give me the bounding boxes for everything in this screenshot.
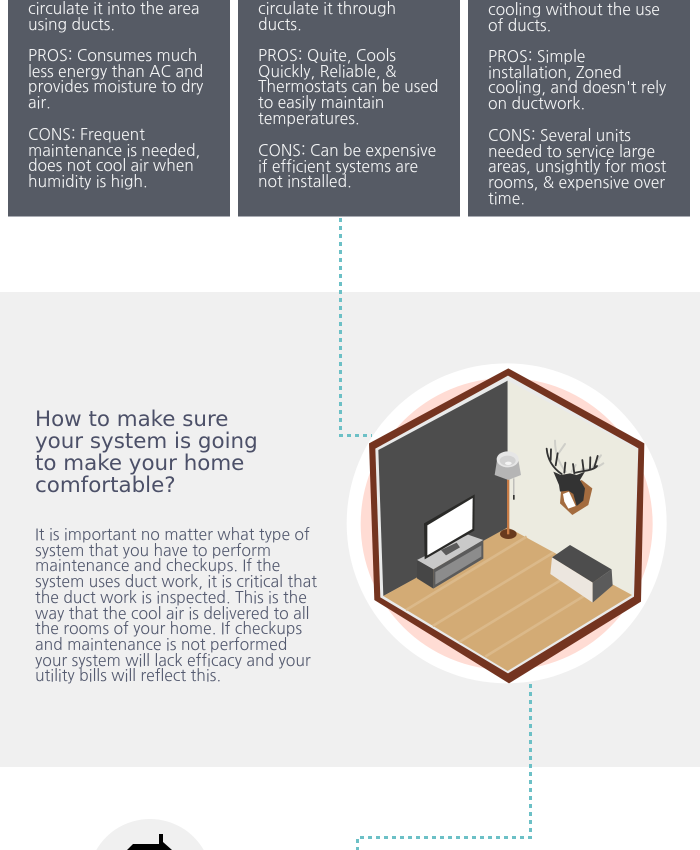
arrow: dotted connector from cards to room	[340, 218, 372, 436]
icon: house with chimney	[127, 834, 172, 850]
icon: bottom circle	[96, 819, 204, 850]
wood floor	[383, 527, 632, 671]
text: evaporative cooler cons: maintenance is needed,	[28, 144, 200, 159]
heading: how to make sure: How to make sure	[35, 407, 228, 432]
text: evaporative cooler pros: provides moisture to dry	[28, 80, 203, 95]
text: central air pros: Thermostats can be used	[258, 80, 438, 95]
text: central air pros	[258, 48, 438, 127]
heading: how to make sure: your system is going	[35, 429, 258, 454]
text: maintenance paragraph: utility bills will reflect this.	[35, 669, 221, 684]
text: maintenance paragraph: the rooms of your home. If checkups	[35, 622, 302, 637]
text: maintenance paragraph: and maintenance is not performed	[35, 638, 287, 653]
text: maintenance paragraph: your system will lack efficacy and your	[35, 654, 311, 669]
text: central air cons: not installed.	[258, 175, 352, 190]
text: central air pros: to easily maintain	[258, 96, 384, 111]
text: ductless description: of ducts.	[488, 19, 551, 34]
left wall	[378, 381, 508, 596]
heading: how to make sure	[35, 407, 258, 498]
text: evaporative cooler cons: does not cool air when	[28, 159, 194, 174]
text: ductless cons: rooms, & expensive over	[488, 176, 665, 191]
television	[424, 494, 475, 559]
text: ductless pros: installation, Zoned	[488, 66, 622, 81]
text: evaporative cooler cons: CONS: Frequent	[28, 128, 145, 143]
text: maintenance paragraph: system that you have to perform	[35, 544, 271, 559]
icon: isometric room illustration	[347, 363, 667, 683]
text: ductless description	[488, 2, 660, 34]
right wall	[508, 381, 638, 595]
text: ductless pros	[488, 49, 666, 112]
text: maintenance paragraph: the duct work is inspected. This is the	[35, 591, 307, 606]
arrow: dotted connector from room to next section	[358, 684, 530, 850]
text: ductless cons: needed to service large	[488, 145, 655, 160]
inner white hexagon	[375, 376, 638, 673]
text: evaporative cooler cons: humidity is high.	[28, 175, 148, 190]
text: central air pros: Quickly, Reliable, &	[258, 65, 396, 80]
text: central air pros: PROS: Quite, Cools	[258, 49, 396, 64]
white neck patch	[563, 492, 576, 509]
heading: how to make sure: comfortable?	[35, 473, 176, 498]
text: central air description: ducts.	[258, 18, 302, 33]
text: central air cons: CONS: Can be expensive	[258, 144, 436, 159]
text: evaporative cooler description: using ducts.	[28, 18, 115, 33]
text: ductless cons: time.	[488, 192, 525, 207]
text: ductless cons: CONS: Several units	[488, 129, 631, 144]
panel: ductless card	[468, 0, 690, 217]
text: central air description: circulate it through	[258, 2, 396, 17]
text: ductless cons: areas, unsightly for most	[488, 160, 666, 175]
text: ductless description: cooling without the use	[488, 3, 660, 18]
bench	[550, 545, 613, 603]
text: ductless pros: on ductwork.	[488, 97, 585, 112]
background antlers	[555, 441, 603, 472]
white badge circle	[347, 363, 667, 683]
text: central air description	[258, 1, 396, 33]
pink circle	[361, 378, 653, 670]
floor plank lines	[406, 537, 603, 657]
text: ductless pros: cooling, and doesn't rely	[488, 81, 666, 96]
text: ductless cons	[488, 128, 666, 207]
text: central air cons	[258, 143, 436, 190]
floor lamp	[495, 451, 521, 539]
text: evaporative cooler pros	[28, 48, 204, 111]
text: central air cons: if efficient systems are	[258, 160, 418, 175]
text: central air pros: temperatures.	[258, 112, 360, 127]
panel: maintenance section background	[0, 292, 700, 767]
text: evaporative cooler description: circulate it into the area	[28, 2, 199, 17]
text: evaporative cooler cons	[28, 128, 200, 190]
text: maintenance paragraph: way that the cool air is delivered to all	[35, 607, 309, 622]
text: evaporative cooler pros: less energy than AC and	[28, 65, 203, 80]
TV stand	[417, 535, 483, 589]
front antlers	[547, 449, 598, 474]
text: maintenance paragraph: It is important no matter what type of	[35, 528, 310, 543]
text: maintenance paragraph	[35, 527, 317, 684]
text: evaporative cooler pros: air.	[28, 96, 51, 111]
text: evaporative cooler description	[28, 1, 199, 33]
heading: how to make sure: to make your home	[35, 451, 244, 476]
brown hexagon frame	[369, 368, 644, 683]
plaque	[560, 480, 592, 515]
text: evaporative cooler pros: PROS: Consumes much	[28, 49, 197, 64]
text: maintenance paragraph: system uses duct work, it is critical that	[35, 575, 317, 590]
deer head	[553, 472, 585, 506]
panel: central air card	[238, 0, 460, 217]
text: maintenance paragraph: maintenance and checkups. If the	[35, 559, 280, 574]
mounted deer head	[547, 441, 603, 515]
panel: evaporative cooler card	[8, 0, 230, 217]
text: ductless pros: PROS: Simple	[488, 50, 585, 65]
